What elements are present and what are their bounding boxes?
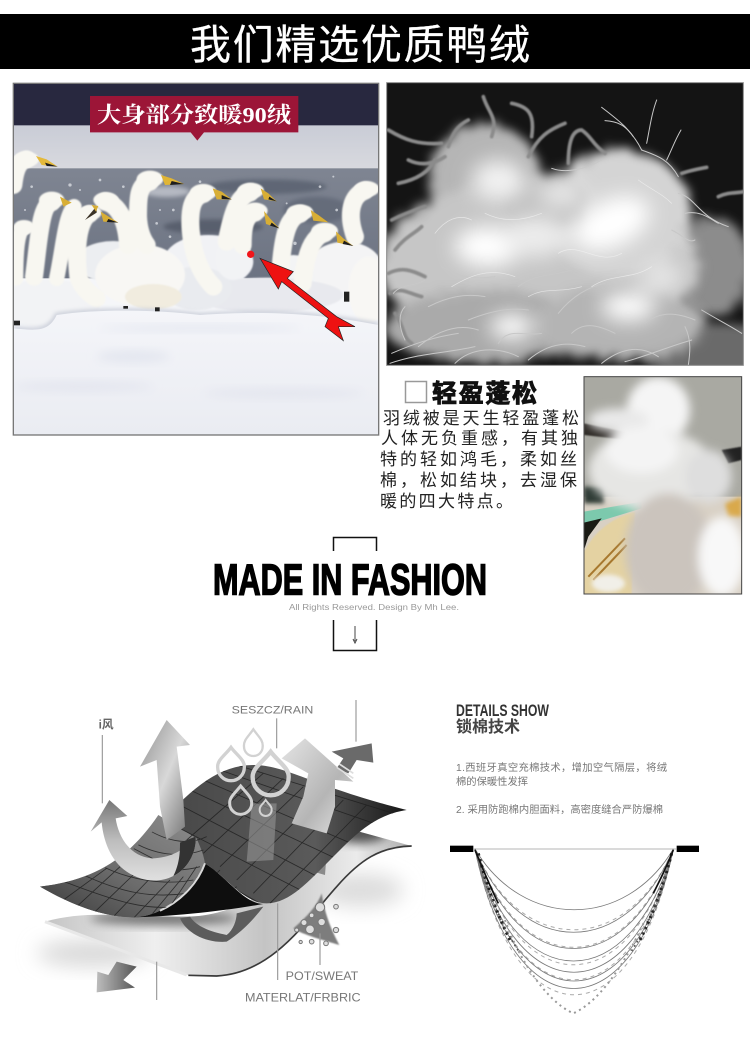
dotted edges — [475, 850, 673, 1013]
red label — [90, 96, 298, 141]
central translucent arrow — [247, 803, 277, 862]
arrow: tall up — [140, 720, 190, 840]
top line — [473, 847, 677, 851]
label: rain: SESZCZ/RAIN — [232, 704, 313, 716]
details show text — [456, 702, 667, 816]
grid lines — [60, 765, 393, 918]
paragraph: 羽绒被是天生轻盈蓬松 — [383, 409, 579, 428]
text block: light and fluffy — [380, 380, 579, 511]
red arrow — [260, 258, 355, 341]
red dot — [247, 251, 254, 258]
sweat particles — [293, 893, 339, 946]
arrow: big right — [282, 738, 353, 833]
title text: 我们精选优质鸭绒 — [190, 22, 530, 68]
paragraph: 人体无负重感，有其独 — [381, 429, 578, 448]
brand logo: made in fashion — [213, 538, 487, 650]
top dark fabric sheet — [40, 765, 407, 917]
swan beaks — [36, 156, 353, 246]
details body: 2. 采用防跑棉内胆面料，高密度缝合严防爆棉 — [456, 803, 663, 816]
chinese subheading: 锁棉技术 — [456, 717, 520, 736]
label: wind: i风 — [99, 719, 114, 732]
heading: 轻盈蓬松 — [432, 380, 537, 408]
details body — [456, 761, 667, 816]
details heading: DETAILS SHOW — [456, 702, 549, 720]
paragraph — [380, 409, 579, 511]
bottom bracket — [334, 620, 376, 650]
water drops — [218, 729, 289, 816]
arrow: curved left — [91, 800, 196, 881]
down arrow — [353, 626, 357, 643]
brand name: MADE IN FASHION — [213, 556, 487, 604]
top bracket — [334, 538, 376, 551]
underside fold — [180, 907, 263, 942]
leader lines — [102, 700, 356, 1000]
fluff cloud — [588, 377, 745, 607]
rights line: All Rights Reserved. Design By Mh Lee. — [289, 603, 459, 612]
arrow: lower left — [97, 962, 137, 992]
title bar — [0, 14, 750, 69]
quilting cross-section diagram — [450, 846, 699, 1013]
details body: 1.西班牙真空充棉技术，增加空气隔层，将绒 — [456, 761, 667, 774]
feather strands — [388, 97, 743, 343]
photo panel: fluffy down on basket — [584, 377, 745, 607]
top dark band — [13, 83, 379, 125]
paragraph: 特的轻如鸿毛，柔如丝 — [380, 450, 577, 469]
dashed curves — [475, 849, 673, 995]
paragraph: 暖的四大特点。 — [380, 492, 513, 511]
fabric layers diagram — [37, 700, 412, 1005]
swan necks — [13, 159, 365, 298]
swan heads — [13, 152, 379, 239]
fuzz cloud — [378, 123, 705, 363]
solid curves — [475, 849, 673, 988]
folded flap — [40, 815, 205, 917]
checkbox icon — [406, 382, 426, 402]
label: sweat: POT/SWEAT — [286, 970, 358, 983]
lower fabric layer — [45, 823, 412, 976]
details body: 棉的保暖性发挥 — [456, 775, 528, 788]
photo panel: down cluster — [378, 83, 750, 383]
label text: 大身部分致暖90绒 — [97, 102, 291, 127]
swan bodies — [85, 234, 378, 311]
arrow: small upper right — [332, 743, 373, 773]
right anchor bar — [677, 846, 699, 852]
snow bank — [13, 311, 378, 330]
label: material: MATERLAT/FRBRIC — [245, 992, 361, 1005]
left anchor bar — [450, 846, 473, 852]
photo panel: swans on snow — [0, 83, 388, 435]
paragraph: 棉，松如结块，去湿保 — [380, 471, 577, 490]
